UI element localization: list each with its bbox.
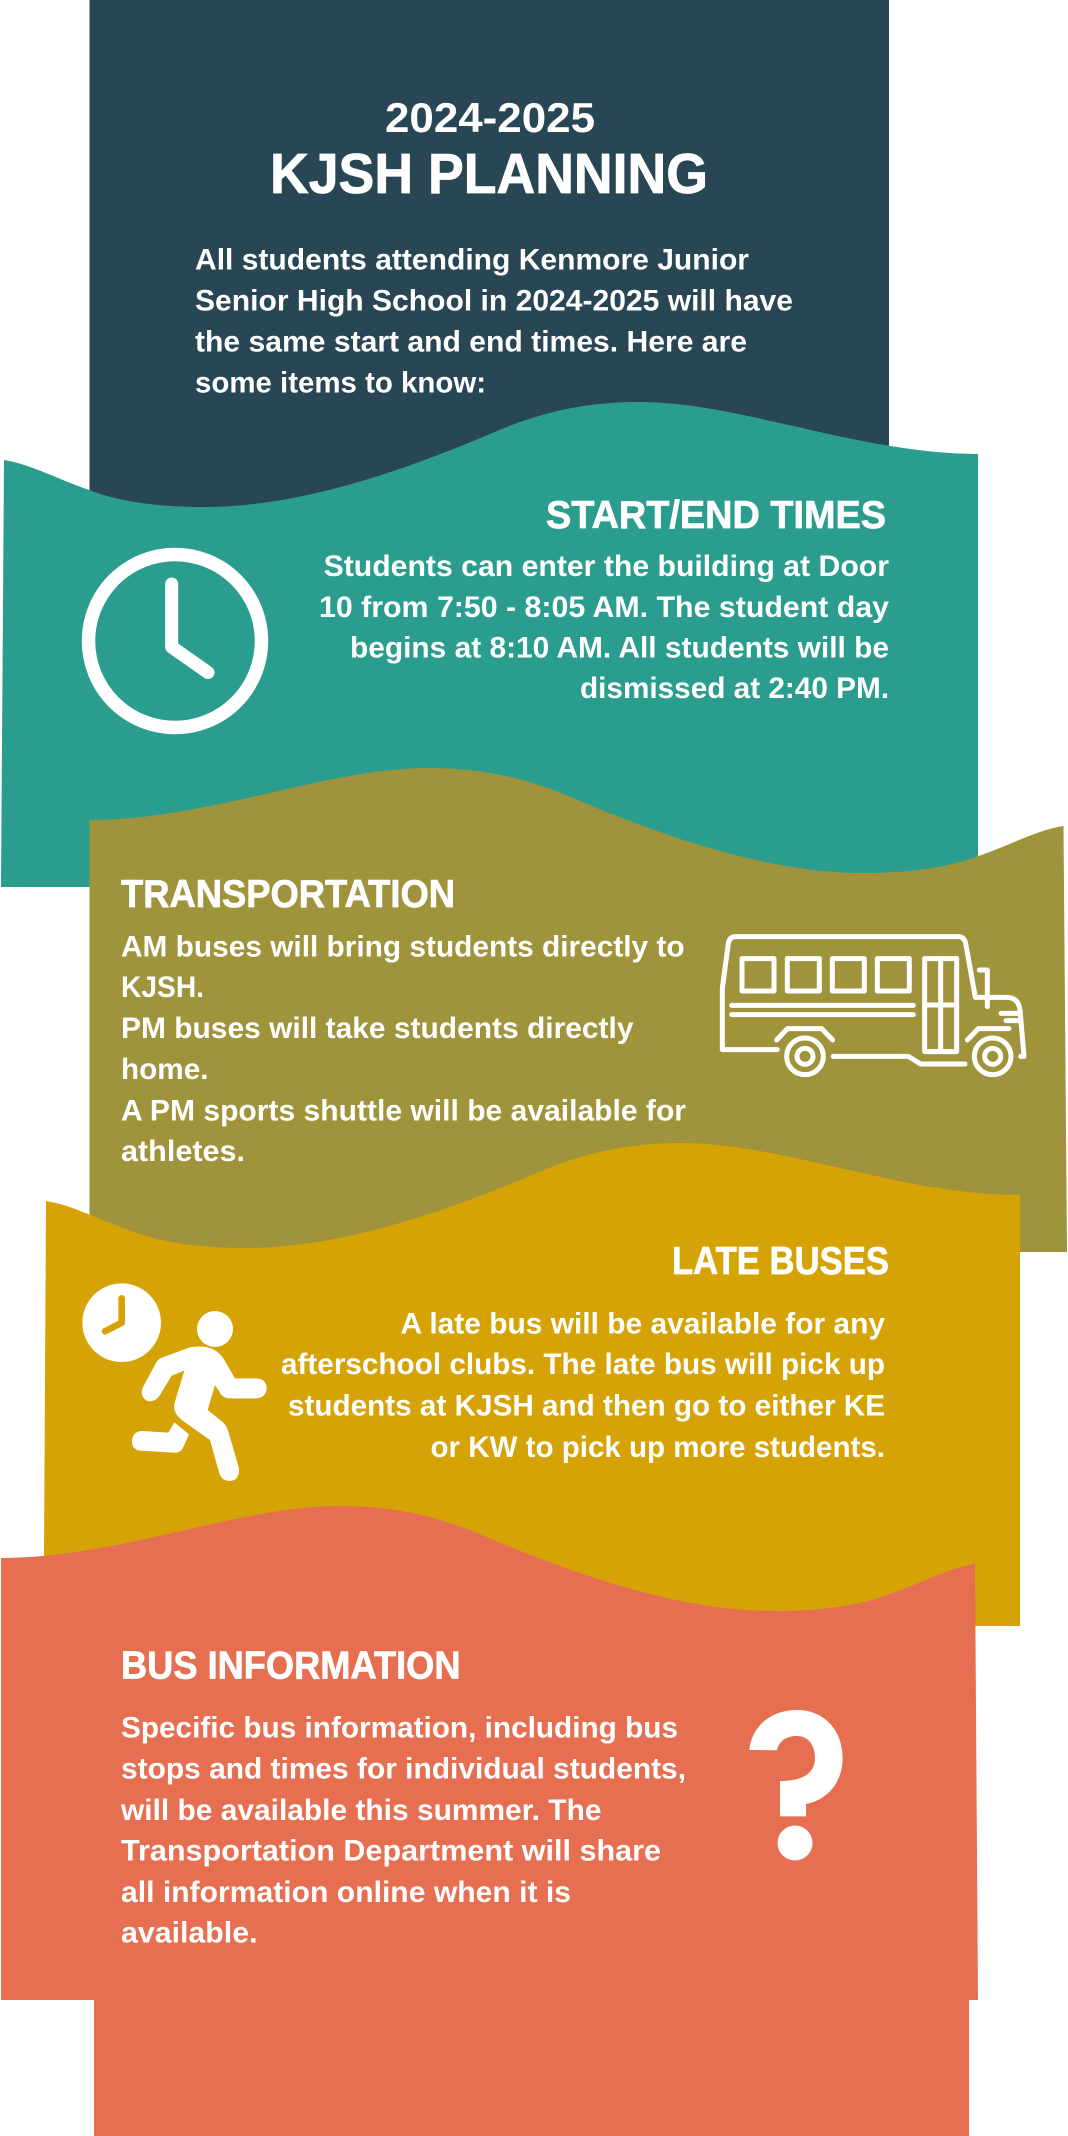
text block: late buses: afterschool clubs. The late bus will pick up	[281, 1348, 885, 1381]
text block: late buses: students at KJSH and then go to either KE	[288, 1390, 885, 1423]
text block: transportation	[121, 930, 686, 1168]
text block: late buses: A late bus will be available for any	[400, 1307, 885, 1340]
panel: late buses	[44, 1143, 1020, 1626]
text block: bus information: will be available this summer. The	[120, 1794, 602, 1827]
text block: transportation: A PM sports shuttle will be available for	[121, 1094, 686, 1127]
icon: question mark	[749, 1710, 843, 1860]
text block: bus information: Transportation Department will share	[121, 1834, 661, 1867]
text block: introduction: All students attending Kenmore Junior	[195, 244, 749, 276]
text block: late buses	[281, 1307, 885, 1464]
title: year: 2024-2025	[385, 94, 595, 141]
panel: transportation	[90, 768, 1067, 1252]
text block: transportation: AM buses will bring students directly to	[121, 930, 685, 964]
heading: start/end times: START/END TIMES	[546, 494, 886, 537]
heading: transportation: TRANSPORTATION	[121, 873, 455, 916]
heading: late buses: LATE BUSES	[672, 1240, 889, 1283]
text block: late buses: or KW to pick up more students.	[430, 1431, 885, 1464]
text block: start/end times: dismissed at 2:40 PM.	[580, 672, 889, 705]
text block: transportation: PM buses will take students directly	[121, 1012, 634, 1045]
text block: introduction: the same start and end times. Here are	[195, 326, 747, 358]
text block: bus information: all information online when it is	[121, 1876, 571, 1909]
text block: transportation: athletes.	[121, 1135, 245, 1168]
icon: runner with clock	[82, 1283, 267, 1481]
title: KJSH Planning: KJSH PLANNING	[270, 142, 708, 206]
text block: transportation: home.	[121, 1053, 208, 1086]
text block: introduction	[195, 244, 793, 400]
text block: bus information: Specific bus information, including bus	[121, 1711, 678, 1744]
text block: bus information	[120, 1711, 686, 1950]
text block: bus information: stops and times for individual students,	[121, 1753, 686, 1786]
text block: start/end times: Students can enter the building at Door	[324, 550, 889, 583]
text block: introduction: Senior High School in 2024-2025 will have	[195, 284, 793, 318]
text block: introduction: some items to know:	[195, 366, 486, 400]
text block: start/end times: begins at 8:10 AM. All students will be	[350, 632, 889, 664]
panel: bus information	[1, 1506, 978, 2136]
panel: start/end times	[1, 402, 978, 887]
panel: header	[90, 0, 889, 520]
icon: clock	[88, 554, 262, 728]
icon: school bus	[722, 937, 1024, 1075]
heading: bus information: BUS INFORMATION	[121, 1645, 460, 1688]
text block: start/end times	[319, 550, 889, 705]
text block: start/end times: 10 from 7:50 - 8:05 AM. The student day	[319, 591, 889, 624]
text block: bus information: available.	[121, 1917, 258, 1950]
text block: transportation: KJSH.	[121, 971, 204, 1004]
